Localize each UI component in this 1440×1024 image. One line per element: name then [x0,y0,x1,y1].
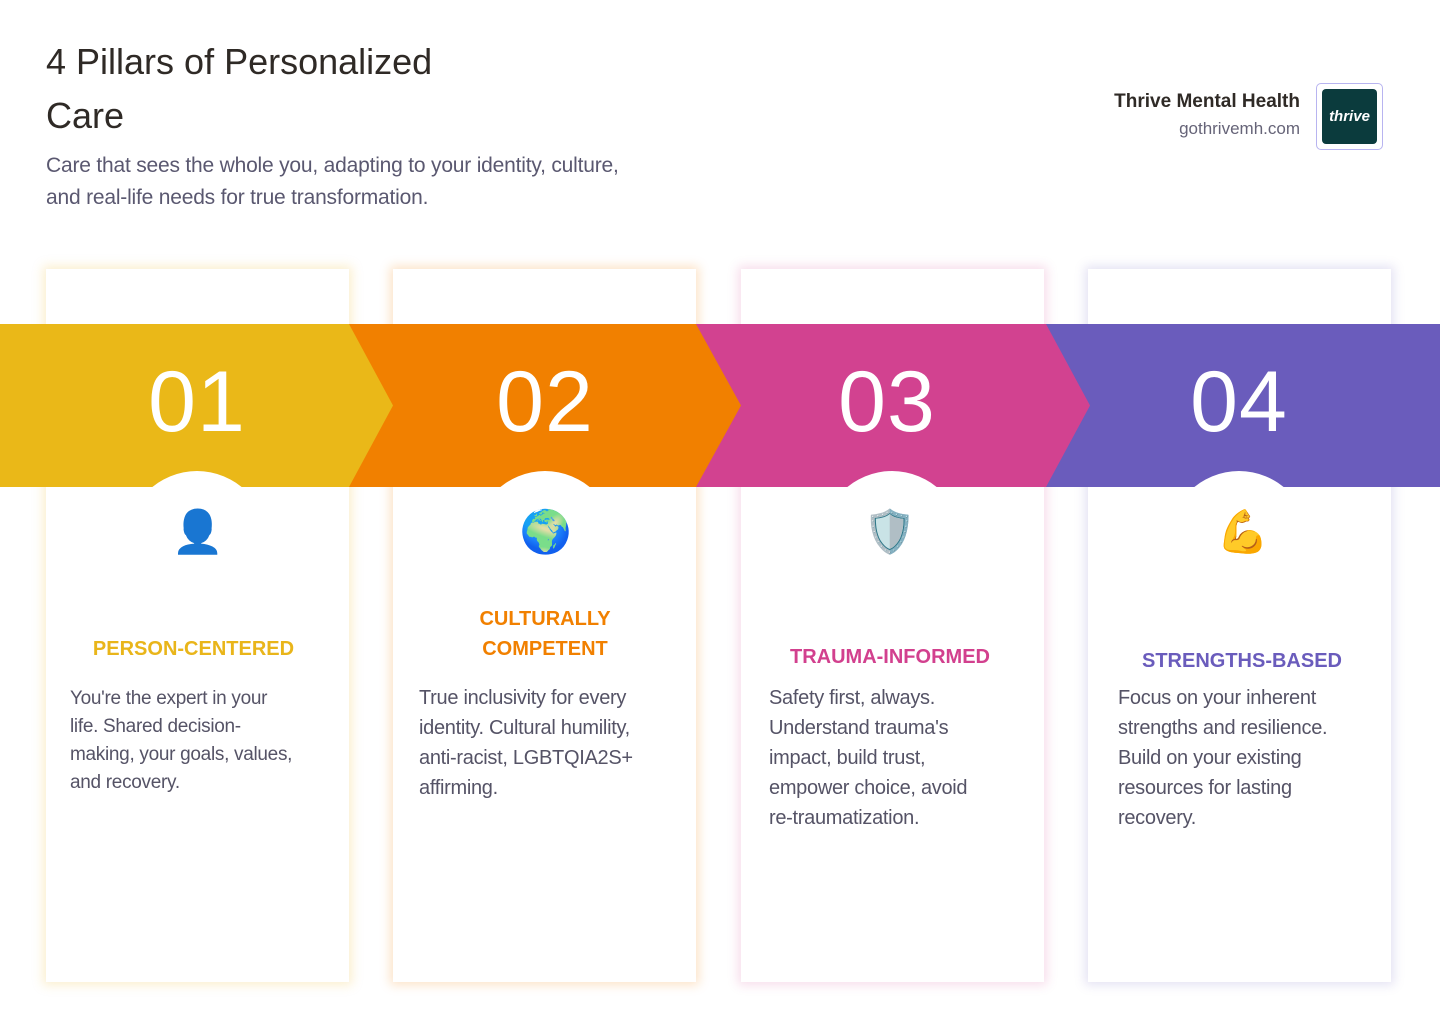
heading 1: PERSON-CENTERED [93,638,294,660]
heading 4: STRENGTHS-BASED [1142,650,1342,672]
number 03: 03 [838,354,936,450]
icon: person: 👤 [172,508,224,557]
icon: flexed arm: 💪 [1217,508,1269,557]
heading 3: TRAUMA-INFORMED [790,646,990,668]
icon: shield: 🛡️ [864,508,916,557]
circles [127,471,267,611]
number 01: 01 [148,354,246,450]
number 02: 02 [496,354,594,450]
subtitle: Care that sees the whole you, adapting to your identity, culture, and real-life needs for true transformation. [46,154,619,209]
heading 2: CULTURALLY COMPETENT [479,608,611,660]
title: 4 Pillars of Personalized Care [46,41,432,136]
body 3: Safety first, always. Understand trauma's impact, build trust, empower choice, avoid re-traumatization. [769,687,967,829]
card 3 [741,269,1044,982]
number 04: 04 [1190,354,1288,450]
brand: gothrivemh.com [1179,119,1300,138]
logo: thrive [1329,108,1370,125]
card 1 [46,269,349,982]
brand: Thrive Mental Health [1114,91,1300,112]
card 2 [393,269,696,982]
body 4: Focus on your inherent strengths and resilience. Build on your existing resources for lasting recovery. [1118,687,1327,829]
card 4 [1088,269,1391,982]
brand [1114,83,1383,150]
logo [1316,83,1383,150]
body 2: True inclusivity for every identity. Cultural humility, anti-racist, LGBTQIA2S+ affirming. [419,687,633,799]
body 1: You're the expert in your life. Shared decision-making, your goals, values, and recovery. [70,688,292,793]
arrow band [0,324,1440,487]
icon: globe: 🌍 [520,508,572,557]
